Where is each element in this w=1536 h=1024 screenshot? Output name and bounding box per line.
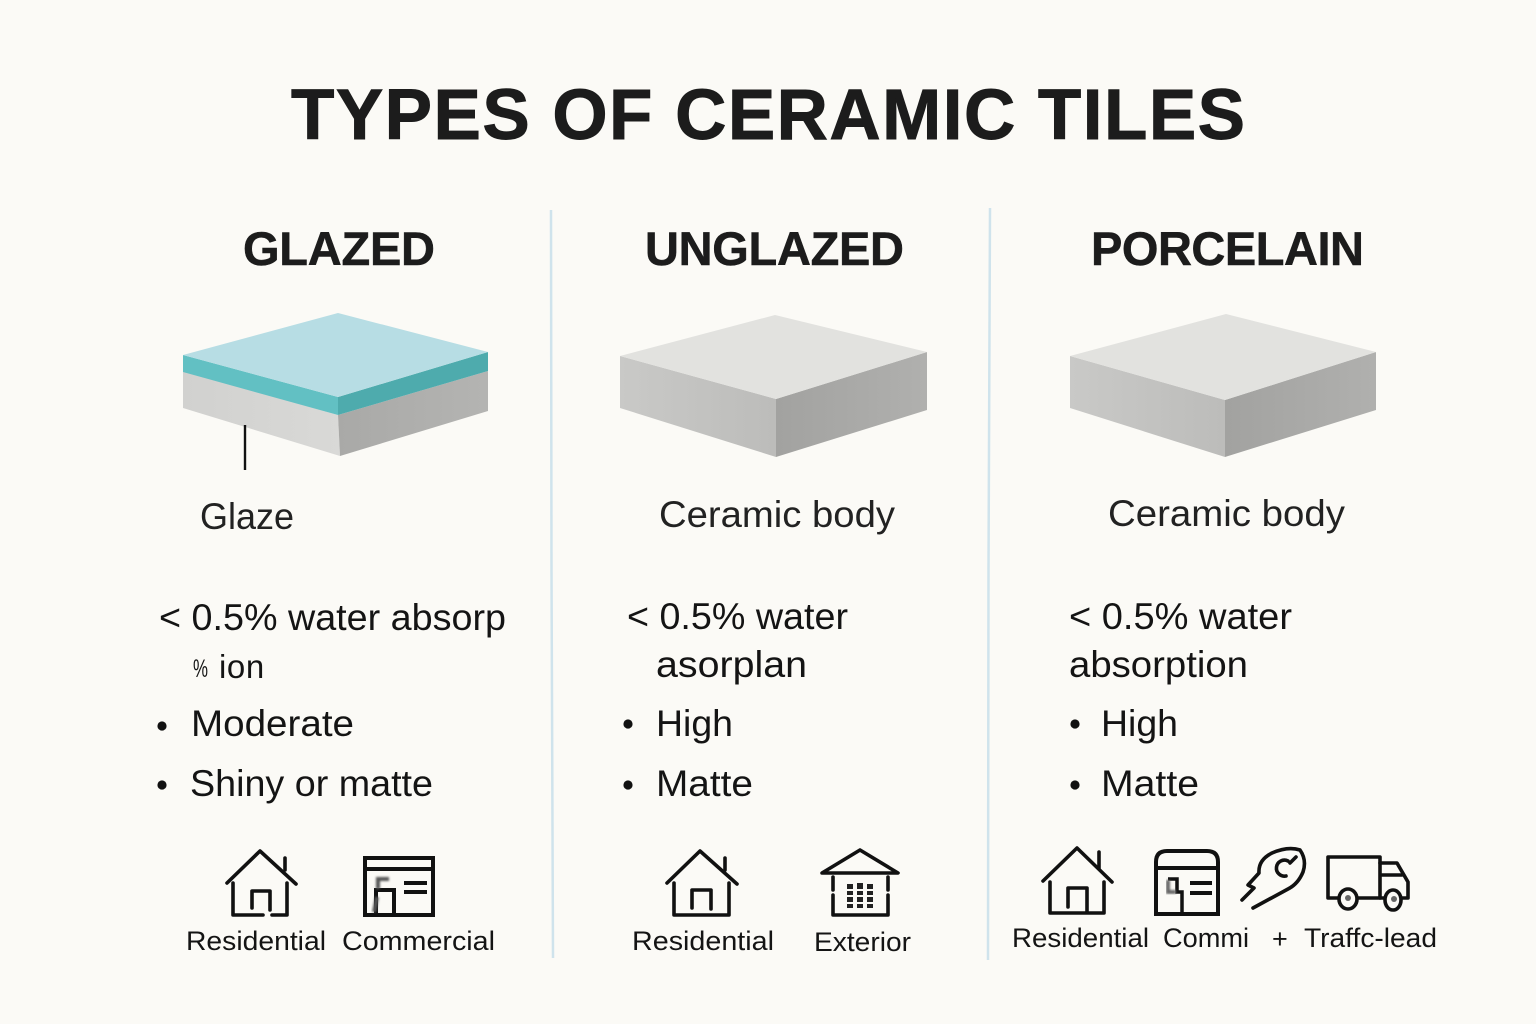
glazed properties list: % xyxy=(193,655,208,683)
porcelain properties list: High xyxy=(1101,703,1178,744)
panel: porcelain xyxy=(1012,222,1437,954)
porcelain properties list: absorption xyxy=(1069,644,1248,685)
heading: porcelain: PORCELAIN xyxy=(1091,222,1364,275)
unglazed properties list: High xyxy=(656,703,733,744)
label: ceramic body: Ceramic body xyxy=(1108,493,1346,534)
glazed properties list: ion xyxy=(219,648,265,685)
icon: house xyxy=(667,851,737,915)
label: commi: Commi xyxy=(1163,923,1249,953)
glazed tile illustration xyxy=(183,313,488,456)
porcelain properties list xyxy=(1069,596,1292,804)
unglazed tile illustration xyxy=(620,315,927,457)
icon: wrench key xyxy=(1242,849,1304,908)
label: residential: Residential xyxy=(632,926,774,956)
label: exterior: Exterior xyxy=(814,927,911,957)
porcelain tile illustration xyxy=(1070,314,1376,457)
icon: commercial building xyxy=(1156,851,1218,914)
label: ceramic body: Ceramic body xyxy=(659,494,896,535)
icon: commercial building xyxy=(365,858,433,915)
glazed properties list xyxy=(157,597,506,804)
unglazed properties list xyxy=(623,596,848,804)
label: traffic-lead: Traffc-lead xyxy=(1304,923,1437,953)
icon: house xyxy=(1043,848,1112,913)
unglazed properties list: asorplan xyxy=(656,644,807,685)
icon: exterior building xyxy=(822,850,898,915)
title: TYPES OF CERAMIC TILES xyxy=(291,76,1245,155)
leader line xyxy=(244,425,246,470)
icon: truck xyxy=(1328,857,1408,910)
unglazed properties list: < 0.5% water xyxy=(627,596,848,637)
icon: house xyxy=(227,851,296,915)
porcelain properties list: < 0.5% water xyxy=(1069,596,1292,637)
unglazed properties list: Matte xyxy=(656,763,753,804)
glazed properties list: < 0.5% water absorp xyxy=(159,597,506,638)
label: plus: + xyxy=(1272,924,1288,954)
label: commercial: Commercial xyxy=(342,926,495,956)
glazed properties list: Shiny or matte xyxy=(190,763,433,804)
label: glaze: Glaze xyxy=(200,496,294,537)
label: residential: Residential xyxy=(186,926,326,956)
porcelain properties list: Matte xyxy=(1101,763,1199,804)
label: residential: Residential xyxy=(1012,923,1149,953)
panel: unglazed xyxy=(620,222,927,957)
glazed properties list: Moderate xyxy=(191,703,354,744)
heading: glazed: GLAZED xyxy=(243,222,435,275)
heading: unglazed: UNGLAZED xyxy=(645,222,904,275)
panel: glazed xyxy=(157,222,506,956)
